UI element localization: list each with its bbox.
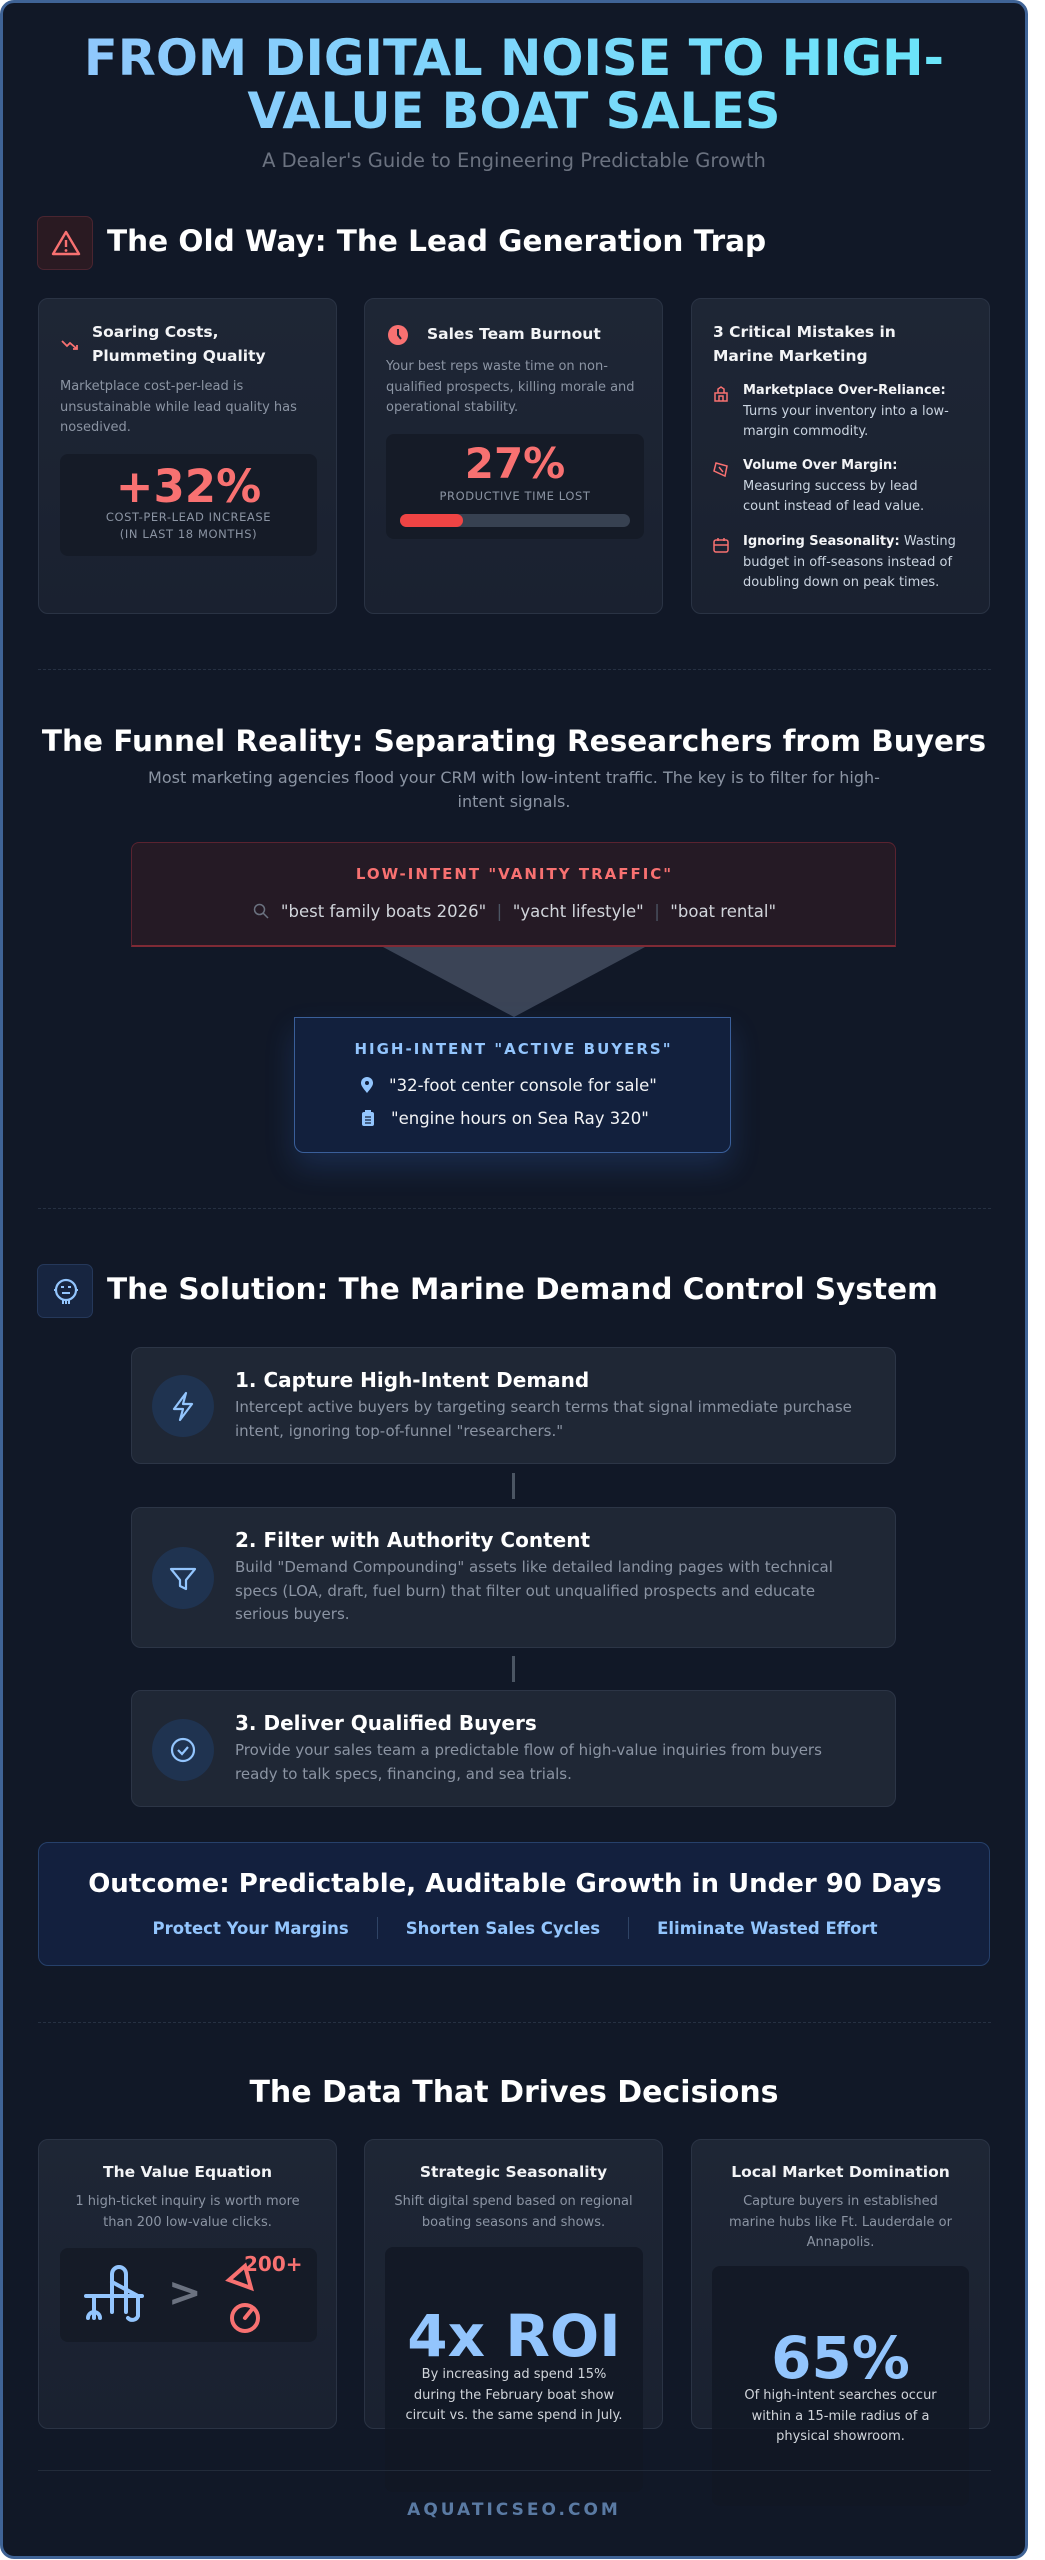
panel: 3 critical mistakes: Marketplace Over-Reliance: Turns your inventory into a low-margin commodity. [743,383,949,439]
step 1: 1. Capture High-Intent Demand [235,1368,589,1392]
low-intent terms: "best family boats 2026" | "yacht lifestyle" | "boat rental" [281,902,776,921]
step 2: 2. Filter with Authority Content [235,1528,590,1552]
panel: 3 critical mistakes: Volume Over Margin: Measuring success by lead count instead of lead value. [743,458,924,514]
title: VALUE BOAT SALES [247,82,781,140]
icon: anchor/boat [84,2265,144,2322]
step 1: Intercept active buyers by targeting search terms that signal immediate purchase intent, ignoring top-of-funnel "researchers." [235,1398,852,1440]
stat: 65%: 65% [771,2324,910,2392]
funnel diagram [131,842,896,1177]
stat: 4x ROI: 4x ROI [407,2302,621,2370]
stat: 4x ROI [385,2247,643,2492]
outcome benefits: Protect Your Margins Shorten Sales Cycles Eliminate Wasted Effort [153,1919,877,1938]
title: FROM DIGITAL NOISE TO HIGH- [84,29,944,87]
subtitle: A Dealer's Guide to Engineering Predictable Growth [262,149,766,172]
outcome panel [38,1842,990,1966]
panel: local market domination: Capture buyers in established marine hubs like Ft. Lauderdale or Annapolis. [729,2194,952,2250]
low-intent box [131,842,896,947]
card title: 3 Critical Mistakes in [713,323,896,341]
panel: soaring costs [38,298,337,614]
card text: Marketplace cost-per-lead is unsustainable while lead quality has nosedived. [60,379,297,435]
high-intent box [294,1017,731,1153]
low-intent box: LOW-INTENT "VANITY TRAFFIC" [356,865,673,883]
icon: funnel [152,1547,214,1609]
heading: data: The Data That Drives Decisions [249,2075,779,2110]
stat: 27% [386,434,644,539]
title [0,32,1028,138]
connector [512,1473,515,1499]
icon: warning [37,216,93,270]
stat: +32%: +32% [116,460,261,513]
heading: old way: The Old Way: The Lead Generation Trap [107,224,766,258]
card title: Plummeting Quality [92,347,266,365]
panel: sales team burnout [364,298,663,614]
card title [92,323,266,365]
high-intent term 2: "engine hours on Sea Ray 320" [391,1109,649,1128]
mistake 2 [713,458,924,514]
icon: bolt [152,1375,214,1437]
greater than: > [168,2270,202,2316]
step 2 [131,1507,896,1648]
step 3: Provide your sales team a predictable flow of high-value inquiries from buyers ready to talk specs, financing, and sea trials. [235,1741,822,1782]
card title: Sales Team Burnout [427,325,601,343]
high-intent term 1: "32-foot center console for sale" [389,1076,657,1095]
panel: 3 critical mistakes: Ignoring Seasonality: Wasting budget in off-seasons instead of doubling down on peak times. [743,534,956,590]
step 3 [131,1690,896,1807]
footer: AQUATICSEO.COM [407,2500,621,2520]
funnel arrow [383,947,645,1017]
stat: 27%: PRODUCTIVE TIME LOST [439,489,591,503]
panel: strategic seasonality [364,2139,663,2429]
equation graphic [60,2248,317,2342]
card title: Marine Marketing [713,347,868,365]
stat: 65%: Of high-intent searches occur within a 15-mile radius of a physical showroom. [744,2388,937,2444]
panel: local market domination: Local Market Domination [731,2163,950,2181]
panel: value equation: 1 high-ticket inquiry is worth more than 200 low-value clicks. [75,2194,300,2230]
icon: solution [37,1264,93,1318]
mistake 3 [713,534,956,590]
card title [713,323,896,365]
stat: +32%: (IN LAST 18 MONTHS) [120,527,257,541]
icon: 200+ clicks: 200+ [244,2252,303,2276]
step 1 [131,1347,896,1464]
mistake 1 [714,383,949,439]
heading: funnel: The Funnel Reality: Separating Researchers from Buyers [42,724,986,758]
stat: 4x ROI: By increasing ad spend 15% during the February boat show circuit vs. the same spend in July. [405,2367,623,2423]
high-intent box: HIGH-INTENT "ACTIVE BUYERS" [354,1040,673,1058]
card text: Your best reps waste time on non-qualified prospects, killing morale and operational stability. [386,359,635,415]
progress bar [400,514,630,527]
stat: 27%: 27% [465,439,565,488]
funnel subtitle: Most marketing agencies flood your CRM with low-intent traffic. The key is to filter for high-intent signals. [148,768,880,811]
stat: +32%: COST-PER-LEAD INCREASE [106,510,271,524]
step 2: Build "Demand Compounding" assets like detailed landing pages with technical specs (LOA, draft, fuel burn) that filter out unqualified prospects and educate serious buyers. [235,1558,833,1623]
panel: 3 critical mistakes [691,298,990,614]
panel: strategic seasonality: Shift digital spend based on regional boating seasons and shows. [394,2194,633,2230]
panel: local market domination [691,2139,990,2429]
stat: +32% [60,454,317,556]
icon: check [152,1719,214,1781]
icon: clock [388,325,408,345]
panel: value equation: The Value Equation [103,2163,272,2181]
heading: solution: The Solution: The Marine Demand Control System [107,1272,938,1306]
card title: Soaring Costs, [92,323,219,341]
panel: strategic seasonality: Strategic Seasonality [420,2163,607,2181]
outcome panel: Outcome: Predictable, Auditable Growth in Under 90 Days [88,1869,942,1899]
icon: trend down [61,340,78,350]
panel: value equation [38,2139,337,2429]
stat: 65% [712,2266,969,2506]
connector [512,1656,515,1682]
step 3: 3. Deliver Qualified Buyers [235,1711,537,1735]
